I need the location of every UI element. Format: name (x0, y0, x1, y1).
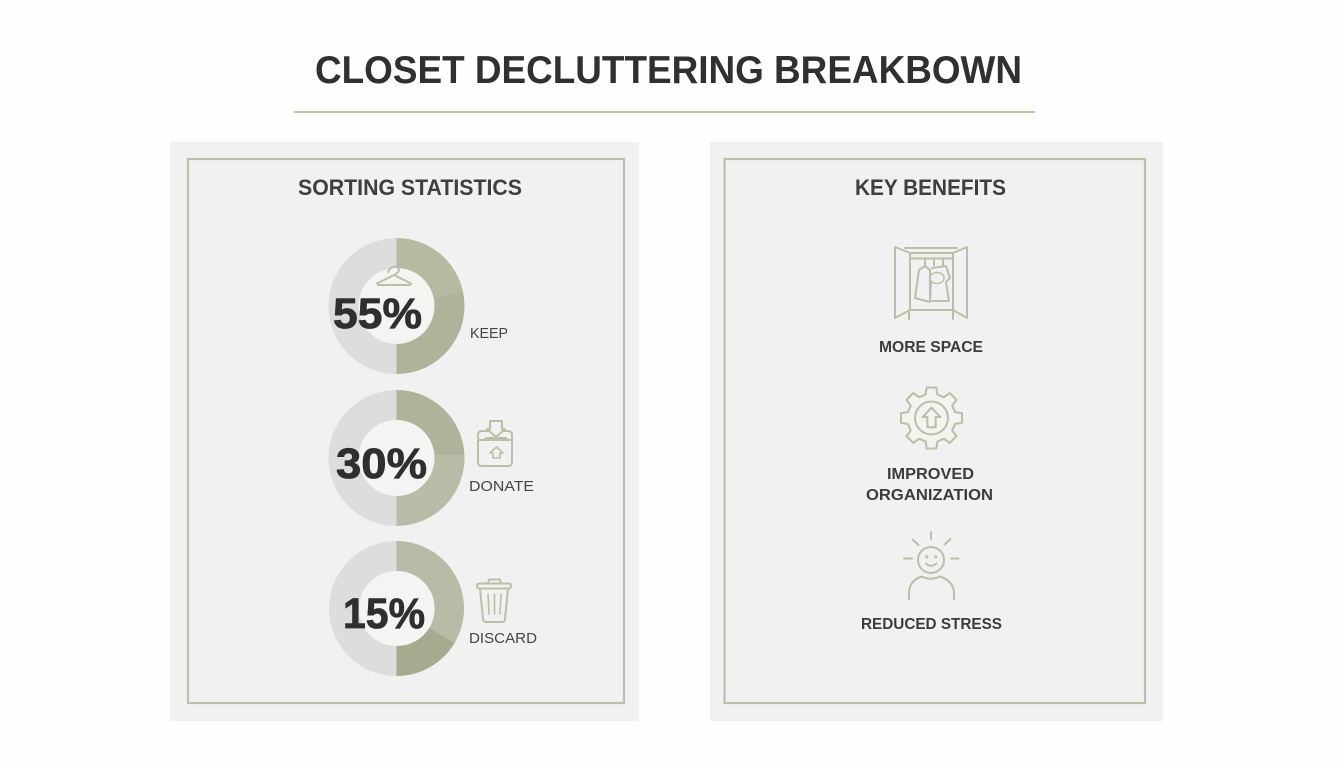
heading: key benefits: KEY BENEFITS (855, 175, 1006, 200)
title: CLOSET DECLUTTERING BREAKBOWN (315, 49, 1022, 92)
heading: sorting statistics: SORTING STATISTICS (298, 175, 522, 200)
label: donate: DONATE (469, 478, 534, 495)
icon: donation box (478, 421, 512, 466)
donut chart: donate 30% (328, 390, 464, 526)
value: 30%: 30% (336, 440, 427, 488)
icon: wardrobe (895, 247, 967, 319)
label: improved organization: ORGANIZATION (866, 487, 993, 504)
icon: gear with up arrow (901, 388, 962, 448)
icon: trash can (477, 580, 511, 622)
icon: hanger (377, 267, 411, 285)
donut chart: keep 55% (328, 238, 465, 374)
value: 15%: 15% (343, 590, 425, 638)
label: more space: MORE SPACE (879, 339, 983, 356)
icon: smiling person (904, 532, 958, 599)
label: keep: KEEP (470, 325, 508, 342)
label: improved organization (866, 466, 993, 504)
panel: sorting statistics (170, 142, 639, 721)
label: improved organization: IMPROVED (887, 466, 974, 483)
value: 55%: 55% (333, 290, 422, 338)
donut chart: discard 15% (329, 541, 464, 676)
label: discard: DISCARD (469, 630, 537, 647)
panel: key benefits (710, 142, 1163, 721)
label: reduced stress: REDUCED STRESS (861, 616, 1002, 633)
